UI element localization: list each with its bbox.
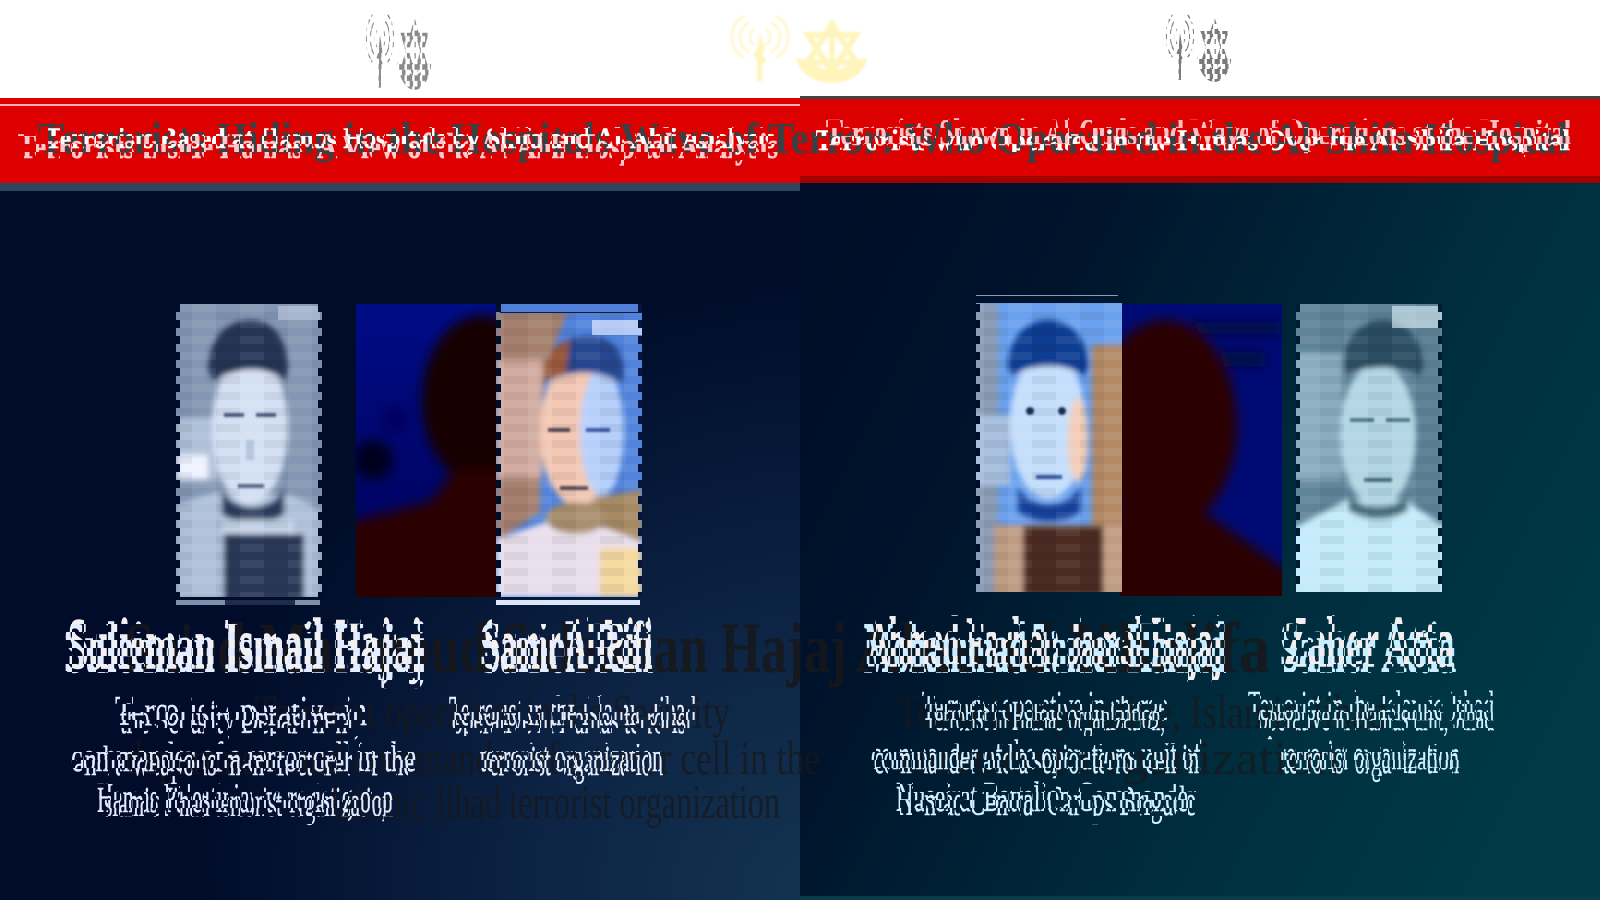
description: left operative: commander of a terror cell in the [71, 735, 416, 781]
photo: centre operative colour portrait [496, 304, 642, 605]
ghost name text: Sa'ed Mahmoud Suleiman Hajaj [125, 608, 847, 688]
description: left operative [71, 689, 416, 826]
description: centre operative [449, 689, 696, 785]
description: left operative: Islamic Jihad terrorist organization [97, 780, 393, 826]
title: left pink layer: Terrorists Inside Hamas: A View of the Al-Ahli Hospital Analysis [18, 126, 778, 166]
name: left operative [66, 617, 424, 688]
photo: right operative colour portrait [970, 295, 1128, 598]
name: left operative: Sulieman Ismail Hajaj [68, 604, 422, 684]
photo: far right operative teal portrait [1290, 304, 1446, 598]
title: left white layer: Terrorists Based at Hamas Hospitals by Shifa and Al-Ahli Analysis [45, 122, 775, 155]
name: centre operative: Sameh Rifi [480, 608, 653, 688]
description: centre operative: terrorist organization [480, 735, 663, 781]
description: right operative [871, 684, 1201, 825]
ghost description text: terrorist organization [900, 732, 1340, 785]
description: centre operative: terrorist organization [483, 739, 663, 785]
ghost description text [125, 686, 1387, 829]
panel: right bottom edge [800, 896, 1600, 900]
ghost name text: Ahmad Khalifa [855, 608, 1270, 688]
ghost description text: department and commander of a terror cell in the [125, 732, 820, 785]
photo: left operative grey portrait [176, 304, 322, 605]
panel: right red title bar [800, 96, 1600, 183]
photo: right dark silhouette [1120, 304, 1282, 596]
description: centre operative: Terrorist in the Islamic Jihad [449, 689, 696, 735]
description: left operative: the Security Department, [120, 697, 360, 743]
description: right operative: Terrorist operative in charge [922, 684, 1168, 730]
description: left operative: and a weapons manufacturer of the [74, 739, 414, 785]
panel: right background [800, 180, 1600, 896]
description: right operative: commander of the operations unit of [871, 733, 1201, 779]
name: right operative [864, 615, 1226, 682]
ghost description text: Islamic Jihad terrorist organization [330, 776, 780, 829]
description: right operative: Nuseirat Battalion Commander [896, 775, 1196, 821]
photo: left dark silhouette [356, 304, 496, 597]
infographic canvas: Samir Al-Rifi [484, 604, 652, 684]
ghost description text: Terrorist operative in the Security [255, 686, 730, 739]
panel: left red title bar [0, 98, 800, 191]
logo: left grey emblem [366, 15, 431, 90]
description: right operative: Hamas Central Camps Brigade [896, 779, 1196, 825]
name: left operative: Suleiman Ismail Hajaj [64, 608, 426, 688]
logo: pale yellow centre emblem [732, 16, 867, 83]
ghost description text: Terrorist operative, Islamic Jihad [897, 686, 1387, 739]
panel: left background [0, 183, 800, 900]
description: left operative: Terrorist operative in [115, 689, 367, 735]
white header band [0, 0, 1600, 97]
name: centre operative [482, 617, 653, 674]
description: centre operative: operative in Hamas terrorist [452, 697, 692, 743]
description: left operative: Hamas Palestinian terrorist group [97, 776, 393, 822]
description: right operative: commander and a senior terror cell in [874, 737, 1199, 783]
logo: right grey emblem [1166, 15, 1231, 82]
description: right operative: Terrorist in Hamas organization, [925, 694, 1165, 740]
name: far right operative [1281, 615, 1456, 674]
description: far right operative [1248, 684, 1494, 783]
